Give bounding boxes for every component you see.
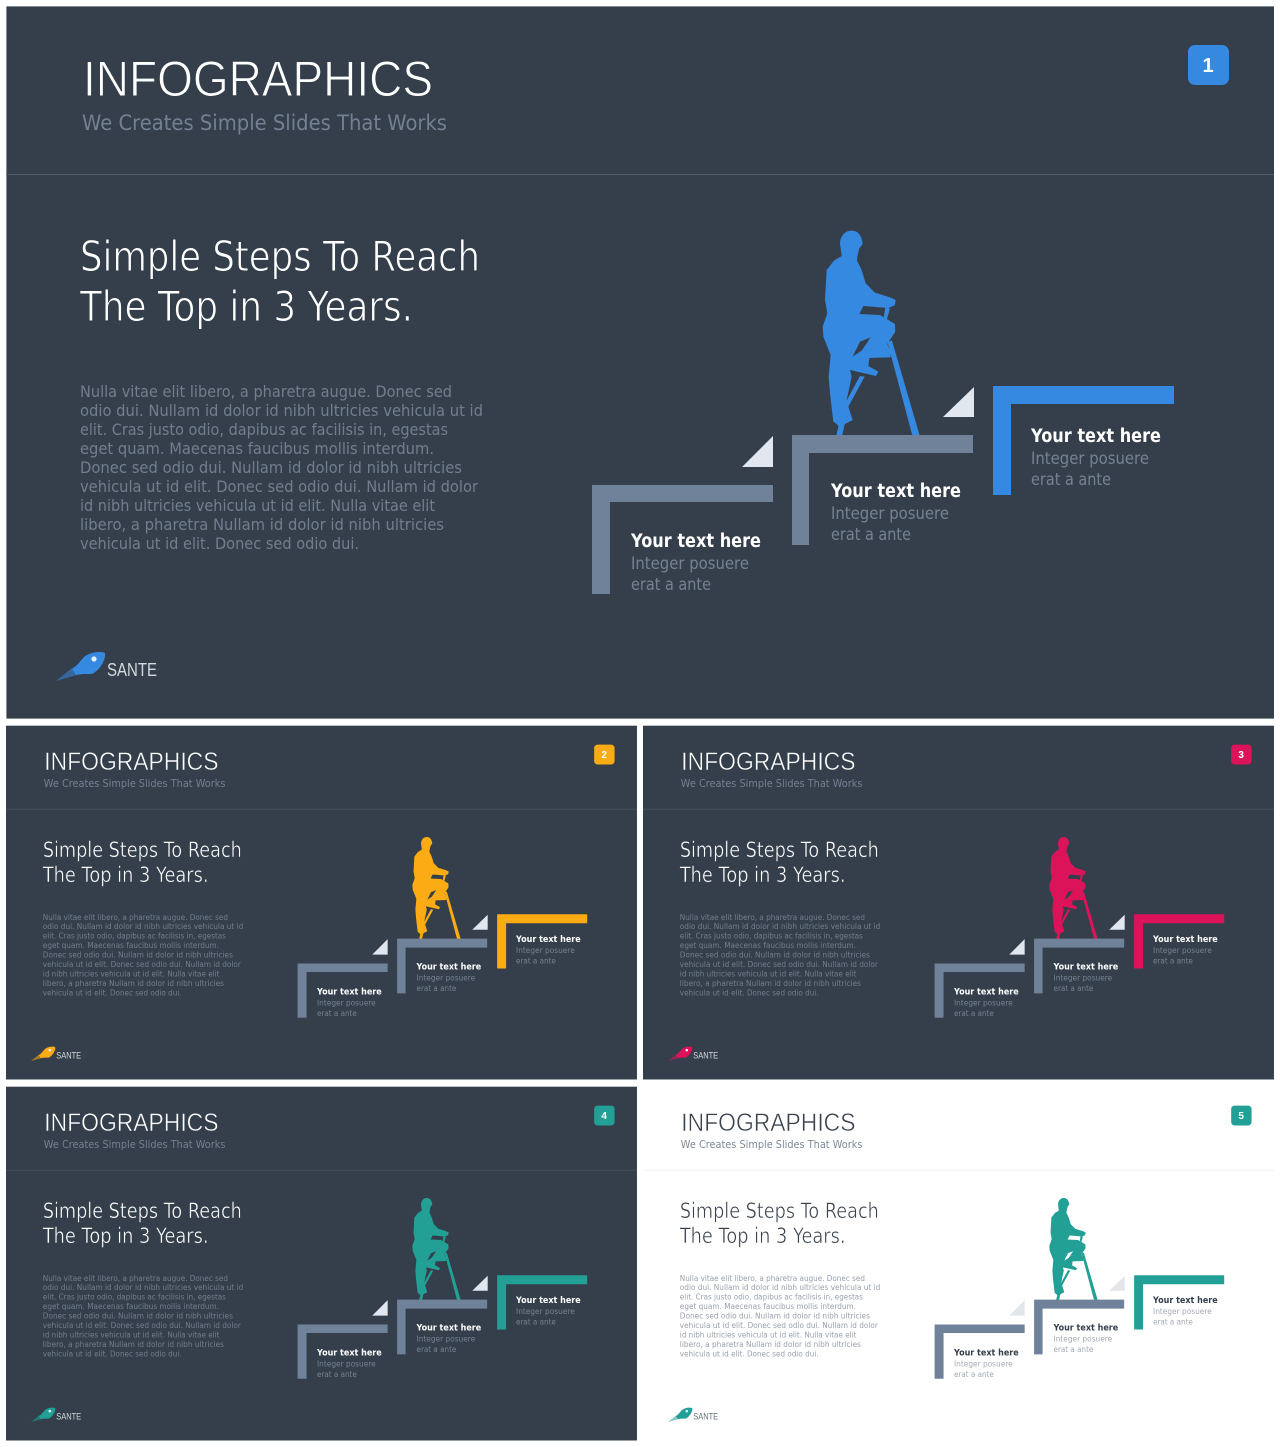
body text: odio dui. Nullam id dolor id nibh ultricies vehicula ut id <box>680 922 880 931</box>
panel: main slide 1 <box>6 6 1274 719</box>
step 2: erat a ante <box>1054 1344 1093 1354</box>
step 2: erat a ante <box>1054 983 1093 993</box>
step 1 <box>935 939 1025 1018</box>
logo: SANTE <box>107 660 157 680</box>
body text: vehicula ut id elit. Donec sed odio dui. Nullam id dolor <box>80 477 478 496</box>
step 3: erat a ante <box>516 956 556 966</box>
step 2: Integer posuere <box>1054 1333 1112 1343</box>
body text: Donec sed odio dui. Nullam id dolor id nibh ultricies <box>80 458 462 477</box>
step 3: erat a ante <box>516 1317 556 1327</box>
step 3 <box>497 914 587 969</box>
step 2 <box>1034 915 1125 993</box>
body text: eget quam. Maecenas faucibus mollis interdum. <box>43 941 219 950</box>
body text: id nibh ultricies vehicula ut id elit. Nulla vitae elit <box>43 1330 219 1339</box>
body text: elit. Cras justo odio, dapibus ac facilisis in, egestas <box>43 932 226 941</box>
body text: libero, a pharetra Nullam id dolor id nibh ultricies <box>80 515 444 534</box>
panel: slide 5 teal light <box>643 1087 1274 1440</box>
body text: vehicula ut id elit. Donec sed odio dui. <box>80 534 359 553</box>
body text <box>43 1274 243 1358</box>
body text: libero, a pharetra Nullam id dolor id nibh ultricies <box>43 979 224 988</box>
body text: vehicula ut id elit. Donec sed odio dui. Nullam id dolor <box>680 960 879 969</box>
step 2 <box>792 387 974 545</box>
step 3: Your text here <box>515 934 581 945</box>
body text: Nulla vitae elit libero, a pharetra augue. Donec sed <box>680 1274 865 1283</box>
step 1: Your text here <box>316 986 382 997</box>
body text: eget quam. Maecenas faucibus mollis interdum. <box>680 941 856 950</box>
body text: Donec sed odio dui. Nullam id dolor id nibh ultricies <box>680 951 870 960</box>
logo: SANTE <box>56 1412 81 1422</box>
heading: Simple Steps To Reach <box>680 838 879 862</box>
step 3: Your text here <box>515 1295 581 1306</box>
step 1: erat a ante <box>954 1008 994 1018</box>
heading: The Top in 3 Years. <box>79 282 413 331</box>
heading: The Top in 3 Years. <box>679 1224 846 1248</box>
heading <box>679 838 879 887</box>
body text: libero, a pharetra Nullam id dolor id nibh ultricies <box>43 1340 224 1349</box>
logo <box>56 652 157 681</box>
step 3: Integer posuere <box>1031 449 1149 468</box>
step 2: Integer posuere <box>417 1333 475 1343</box>
body text: Donec sed odio dui. Nullam id dolor id nibh ultricies <box>680 1312 870 1321</box>
step 3: Integer posuere <box>516 1306 575 1316</box>
step 1: Your text here <box>630 531 761 552</box>
logo <box>31 1408 81 1422</box>
step 1: Your text here <box>953 986 1019 997</box>
heading: Simple Steps To Reach <box>680 1199 879 1223</box>
icon: worker on ladder <box>823 231 920 437</box>
title: INFOGRAPHICS <box>681 748 855 776</box>
step 3 <box>497 1275 587 1330</box>
icon: worker on ladder <box>1049 1198 1098 1300</box>
body text: vehicula ut id elit. Donec sed odio dui. <box>43 1349 182 1358</box>
icon: worker on ladder <box>412 837 461 939</box>
body text: libero, a pharetra Nullam id dolor id nibh ultricies <box>680 979 861 988</box>
body text: Nulla vitae elit libero, a pharetra augue. Donec sed <box>43 1274 228 1283</box>
badge: number 1 <box>1188 45 1229 85</box>
heading <box>42 838 242 887</box>
body text: Nulla vitae elit libero, a pharetra augue. Donec sed <box>80 382 452 401</box>
badge: number 2 <box>594 745 615 765</box>
body text: Nulla vitae elit libero, a pharetra augue. Donec sed <box>43 913 228 922</box>
body text: id nibh ultricies vehicula ut id elit. Nulla vitae elit <box>43 969 219 978</box>
step 1: Integer posuere <box>317 1358 376 1368</box>
body text <box>80 382 483 553</box>
step 1: erat a ante <box>317 1369 357 1379</box>
step 1: erat a ante <box>317 1008 357 1018</box>
step 1: Integer posuere <box>631 554 749 573</box>
step 1 <box>298 939 388 1018</box>
step 2: Your text here <box>1053 962 1118 973</box>
subtitle: We Creates Simple Slides That Works <box>82 111 447 135</box>
heading: Simple Steps To Reach <box>43 1199 242 1223</box>
body text: vehicula ut id elit. Donec sed odio dui. <box>43 988 182 997</box>
step 1 <box>935 1300 1025 1379</box>
body text: Donec sed odio dui. Nullam id dolor id nibh ultricies <box>43 1312 233 1321</box>
step 3: Integer posuere <box>516 945 575 955</box>
body text: libero, a pharetra Nullam id dolor id nibh ultricies <box>680 1340 861 1349</box>
badge: number 3 <box>1231 745 1252 765</box>
step 1: Integer posuere <box>954 997 1013 1007</box>
body text: vehicula ut id elit. Donec sed odio dui. Nullam id dolor <box>680 1321 879 1330</box>
step 2: Integer posuere <box>417 972 475 982</box>
panel: slide 4 teal dark <box>6 1087 637 1440</box>
step 1: Integer posuere <box>954 1358 1013 1368</box>
body text: vehicula ut id elit. Donec sed odio dui. <box>680 1349 819 1358</box>
body text: vehicula ut id elit. Donec sed odio dui. <box>680 988 819 997</box>
step 2: Integer posuere <box>831 504 949 523</box>
badge: number 5 <box>1231 1106 1252 1126</box>
step 1: Your text here <box>953 1347 1019 1358</box>
body text: eget quam. Maecenas faucibus mollis interdum. <box>680 1302 856 1311</box>
step 2 <box>397 915 488 993</box>
heading <box>79 232 480 331</box>
subtitle: We Creates Simple Slides That Works <box>681 778 862 790</box>
step 1: Integer posuere <box>317 997 376 1007</box>
badge: number 3: 3 <box>1238 750 1244 761</box>
step 3 <box>993 386 1174 495</box>
step 2: erat a ante <box>831 525 911 544</box>
badge: number 4: 4 <box>601 1111 607 1122</box>
body text: elit. Cras justo odio, dapibus ac facilisis in, egestas <box>43 1293 226 1302</box>
step 1 <box>592 436 773 594</box>
step 1: erat a ante <box>631 575 711 594</box>
body text: id nibh ultricies vehicula ut id elit. Nulla vitae elit <box>680 1330 856 1339</box>
subtitle: We Creates Simple Slides That Works <box>44 778 225 790</box>
body text: elit. Cras justo odio, dapibus ac facilisis in, egestas <box>680 1293 863 1302</box>
title: INFOGRAPHICS <box>44 1109 218 1137</box>
step 2 <box>1034 1276 1125 1354</box>
logo: SANTE <box>693 1412 718 1422</box>
logo: SANTE <box>56 1051 81 1061</box>
subtitle: We Creates Simple Slides That Works <box>44 1139 225 1151</box>
step 2: erat a ante <box>417 1344 456 1354</box>
step 2: Integer posuere <box>1054 972 1112 982</box>
heading <box>679 1199 879 1248</box>
logo <box>31 1047 81 1061</box>
heading: Simple Steps To Reach <box>43 838 242 862</box>
step 3: Integer posuere <box>1153 1306 1212 1316</box>
icon: worker on ladder <box>412 1198 461 1300</box>
step 2: Your text here <box>1053 1323 1118 1334</box>
step 3: Integer posuere <box>1153 945 1212 955</box>
title: INFOGRAPHICS <box>44 748 218 776</box>
logo <box>668 1408 718 1422</box>
body text: id nibh ultricies vehicula ut id elit. Nulla vitae elit <box>80 496 435 515</box>
step 1 <box>298 1300 388 1379</box>
body text <box>680 1274 880 1358</box>
body text: eget quam. Maecenas faucibus mollis interdum. <box>43 1302 219 1311</box>
step 2: Your text here <box>416 1323 481 1334</box>
step 3 <box>1134 1275 1224 1330</box>
heading: The Top in 3 Years. <box>42 863 209 887</box>
body text: odio dui. Nullam id dolor id nibh ultricies vehicula ut id <box>80 401 483 420</box>
body text: vehicula ut id elit. Donec sed odio dui. Nullam id dolor <box>43 1321 242 1330</box>
step 2: erat a ante <box>417 983 456 993</box>
step 3: Your text here <box>1152 934 1218 945</box>
title: INFOGRAPHICS <box>681 1109 855 1137</box>
logo: SANTE <box>693 1051 718 1061</box>
badge: number 4 <box>594 1106 615 1126</box>
panel: slide 3 pink <box>643 726 1274 1079</box>
heading: The Top in 3 Years. <box>42 1224 209 1248</box>
heading: Simple Steps To Reach <box>80 232 480 281</box>
step 3: erat a ante <box>1153 956 1193 966</box>
body text: elit. Cras justo odio, dapibus ac facilisis in, egestas <box>80 420 448 439</box>
step 1: erat a ante <box>954 1369 994 1379</box>
step 1: Your text here <box>316 1347 382 1358</box>
badge: number 2: 2 <box>601 750 607 761</box>
heading <box>42 1199 242 1248</box>
title: INFOGRAPHICS <box>83 51 433 107</box>
step 3: Your text here <box>1030 426 1161 447</box>
body text: vehicula ut id elit. Donec sed odio dui. Nullam id dolor <box>43 960 242 969</box>
body text: elit. Cras justo odio, dapibus ac facilisis in, egestas <box>680 932 863 941</box>
body text: odio dui. Nullam id dolor id nibh ultricies vehicula ut id <box>43 922 243 931</box>
badge: number 1: 1 <box>1202 55 1214 77</box>
body text: odio dui. Nullam id dolor id nibh ultricies vehicula ut id <box>43 1283 243 1292</box>
body text: Donec sed odio dui. Nullam id dolor id nibh ultricies <box>43 951 233 960</box>
step 2: Your text here <box>416 962 481 973</box>
body text: id nibh ultricies vehicula ut id elit. Nulla vitae elit <box>680 969 856 978</box>
step 3: erat a ante <box>1153 1317 1193 1327</box>
step 2: Your text here <box>830 481 961 502</box>
subtitle: We Creates Simple Slides That Works <box>681 1139 862 1151</box>
step 3: erat a ante <box>1031 470 1111 489</box>
body text: Nulla vitae elit libero, a pharetra augue. Donec sed <box>680 913 865 922</box>
badge: number 5: 5 <box>1238 1111 1244 1122</box>
body text: eget quam. Maecenas faucibus mollis interdum. <box>80 439 434 458</box>
body text <box>43 913 243 997</box>
step 3: Your text here <box>1152 1295 1218 1306</box>
body text <box>680 913 880 997</box>
heading: The Top in 3 Years. <box>679 863 846 887</box>
icon: worker on ladder <box>1049 837 1098 939</box>
logo <box>668 1047 718 1061</box>
panel: slide 2 orange <box>6 726 637 1079</box>
body text: odio dui. Nullam id dolor id nibh ultricies vehicula ut id <box>680 1283 880 1292</box>
step 2 <box>397 1276 488 1354</box>
step 3 <box>1134 914 1224 969</box>
